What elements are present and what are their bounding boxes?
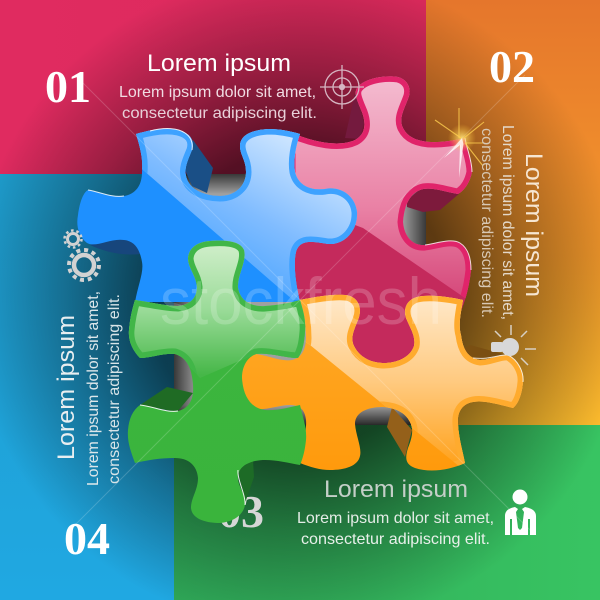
panel: green quadrant — [174, 425, 600, 600]
puzzle piece: blue — [77, 120, 370, 305]
diagonal light lines — [75, 75, 530, 530]
watermark: stockfresh — [160, 264, 442, 338]
icon: businessman — [505, 490, 536, 535]
flaps: dark folded puzzle edges — [90, 93, 507, 503]
text block: orange panel: consectetur adipiscing elit. — [478, 128, 495, 318]
text block: blue panel: Lorem ipsum dolor sit amet, — [85, 291, 102, 486]
panel: red quadrant — [0, 0, 426, 174]
puzzle piece: green — [120, 235, 315, 523]
text block: blue panel — [53, 291, 123, 486]
text block: red panel: Lorem ipsum — [147, 50, 291, 77]
text block: green panel: Lorem ipsum — [324, 476, 468, 503]
number 04: 04 — [64, 513, 110, 564]
number 01: 01 — [45, 61, 91, 112]
text block: orange panel: Lorem ipsum dolor sit amet, — [499, 125, 516, 320]
text block: red panel — [119, 50, 317, 122]
icon: light bulb — [491, 325, 536, 365]
text block: orange panel — [478, 125, 547, 320]
text block: green panel: Lorem ipsum dolor sit amet, — [297, 510, 494, 527]
text block: orange panel: Lorem ipsum — [520, 153, 547, 297]
panel: blue quadrant — [0, 174, 174, 600]
icon: target — [320, 65, 364, 109]
number 02: 02 — [489, 41, 535, 92]
text block: red panel: consectetur adipiscing elit. — [122, 105, 317, 122]
centre gap behind puzzle — [174, 174, 426, 425]
icon: gears — [64, 230, 99, 280]
puzzle piece: orange — [241, 290, 530, 480]
number 03: 03 — [218, 486, 264, 537]
text block: green panel — [297, 476, 494, 548]
text block: blue panel: consectetur adipiscing elit. — [106, 294, 123, 484]
text block: blue panel: Lorem ipsum — [53, 315, 80, 460]
text block: green panel: consectetur adipiscing elit. — [301, 531, 490, 548]
puzzle piece: red — [291, 76, 472, 363]
text block: red panel: Lorem ipsum dolor sit amet, — [119, 84, 316, 101]
sparkle on red piece corner — [435, 108, 484, 178]
panel: orange quadrant — [426, 0, 600, 425]
